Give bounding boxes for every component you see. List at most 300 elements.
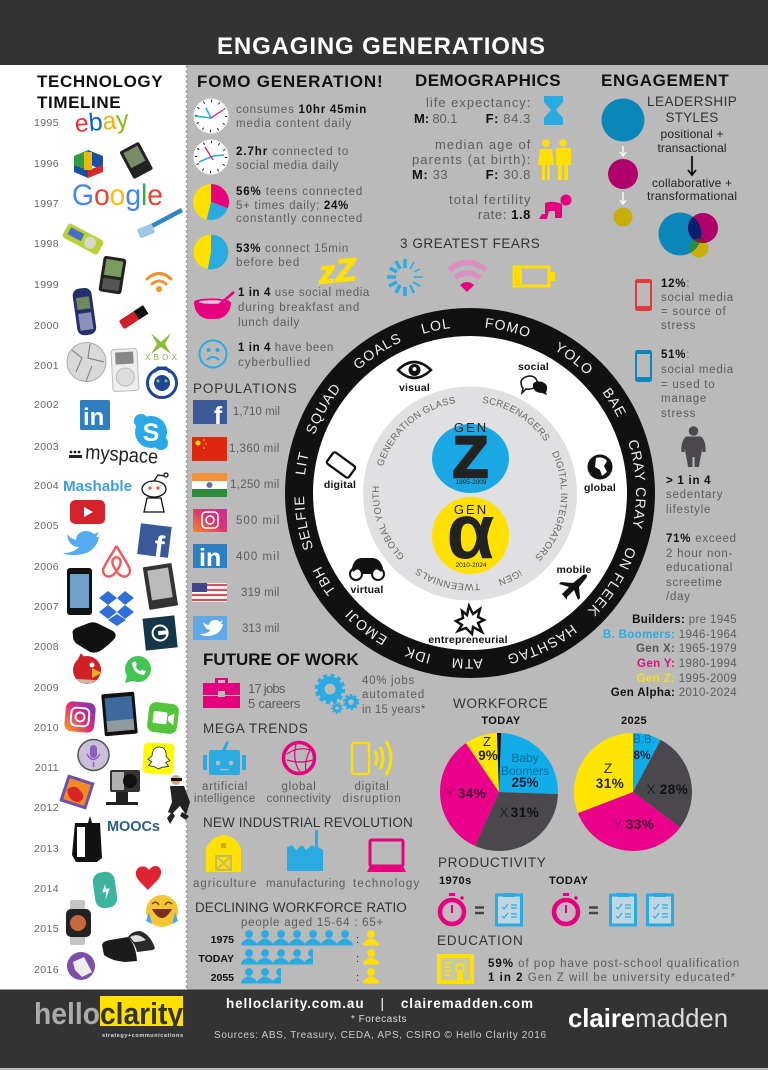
- icon: kindle: [143, 563, 178, 610]
- row labels: TODAY: [198, 953, 234, 965]
- text: revolution labels: agriculture: [193, 878, 257, 890]
- slang words on ring: CRAY CRAY: [629, 440, 646, 530]
- text: ai: intelligence: [194, 793, 256, 805]
- text: styles transition: positional +: [660, 127, 724, 141]
- generation names on inner disc: GENERATION GLASS: [378, 397, 455, 466]
- equals 1970s: [475, 908, 484, 913]
- grey inner disc: [363, 386, 577, 600]
- white ring: [313, 336, 627, 650]
- text: source of stress: = source of: [661, 306, 727, 318]
- heading: engagement: ENGAGEMENT: [601, 71, 729, 90]
- text: manage stress: stress: [661, 408, 696, 420]
- icon: twitter flag: [193, 616, 227, 640]
- icon: instagram: [64, 701, 96, 733]
- icon: blue phone: [635, 350, 652, 382]
- row: 1975: [241, 930, 353, 946]
- text: styles transition: transactional: [658, 141, 726, 155]
- icon: angry bird: [73, 653, 102, 684]
- icon: stopwatch 1970s: [440, 893, 464, 924]
- icon: crawling baby: [539, 194, 572, 219]
- icon: ipod: [111, 348, 139, 392]
- text: leadership styles: [647, 94, 737, 125]
- year labels: 2010: [34, 722, 59, 734]
- text: screentime: 71% exceed: [666, 533, 737, 545]
- equals today: [589, 908, 598, 913]
- pie labels: today: Baby: [511, 751, 539, 765]
- text: median age: F: 30.8: [486, 167, 531, 182]
- icon: xbox: [145, 333, 178, 362]
- legend: generation dates: Gen Z: 1995-2009: [637, 673, 737, 685]
- text: population figures: 1,360 mil: [229, 443, 280, 455]
- chart: central generation wheel: [285, 308, 655, 678]
- logo: claire madden: clairemadden: [568, 1003, 728, 1033]
- heading: declining workforce ratio: DECLINING WORKFORCE RATIO: [195, 900, 407, 915]
- gen z badge: Z: [453, 425, 488, 490]
- icon: airbnb: [103, 546, 130, 577]
- text: styles transition: transformational: [647, 189, 737, 203]
- colons: :: [356, 953, 359, 965]
- text: revolution labels: technology: [353, 878, 420, 890]
- text: education stats: 1 in 2 Gen Z will be university educated*: [488, 972, 736, 984]
- text: source of stress: stress: [661, 320, 696, 332]
- icon: youtube: [70, 500, 105, 524]
- year labels: 2009: [34, 682, 59, 694]
- icon: clock 10hr 45min: [194, 98, 228, 134]
- text: jobs careers: [248, 681, 301, 711]
- text: population figures: 1,710 mil: [233, 406, 280, 418]
- text: source of stress: [661, 278, 734, 332]
- text: connectivity: global: [282, 781, 316, 793]
- chart: workforce ratio pictogram: [198, 917, 384, 984]
- panel: populations: [192, 400, 280, 640]
- panel: fomo generation stats: 5+ times daily; 24%: [236, 200, 349, 212]
- icon: nokia phone: [72, 287, 97, 336]
- year labels: 2004: [34, 480, 59, 492]
- text: automation: [362, 675, 426, 716]
- text: jobs careers: 17 jobs: [248, 681, 286, 696]
- icon: low battery: [514, 267, 555, 286]
- slang words on ring: IDK: [404, 646, 430, 664]
- header band: [0, 0, 768, 65]
- links: helloclarity.com.au | clairemadden.com: [226, 996, 533, 1011]
- text: automation: automated: [362, 689, 425, 701]
- text: today: TODAY: [549, 875, 589, 887]
- icon: mp3 player: [62, 223, 104, 255]
- footer band: [0, 990, 768, 1068]
- year labels: 1999: [34, 279, 59, 291]
- year labels: 2000: [34, 320, 59, 332]
- icon: mobile plane: [556, 564, 592, 600]
- panel: technology timeline: [34, 72, 190, 980]
- year labels: 1995: [34, 117, 59, 129]
- pie labels: today: Boomers: [501, 764, 549, 778]
- year labels: 2016: [34, 964, 59, 976]
- text: education stats: [488, 958, 740, 984]
- icon: ebay: ebay: [74, 105, 130, 138]
- text: screentime: educational: [666, 562, 733, 574]
- icon: usa flag: [192, 583, 227, 602]
- legend: generation dates: Builders: pre 1945: [632, 614, 737, 626]
- chart: workforce 2025 pie: 2025: [621, 715, 647, 727]
- text: population figures: 319 mil: [241, 587, 280, 599]
- logo: hello clarity: hello: [34, 996, 100, 1031]
- year labels: 2014: [34, 883, 59, 895]
- icon: clipboard today one: [610, 893, 636, 925]
- heading: future of work: FUTURE OF WORK: [203, 650, 359, 669]
- panel: future of work: [203, 675, 426, 716]
- row labels: 2055: [211, 972, 234, 984]
- icon: siri: [78, 740, 109, 770]
- legend: generation dates: Gen Y: 1980-1994: [637, 658, 737, 670]
- text: life expectancy: M: 80.1: [414, 111, 458, 126]
- icon: moocs: MOOCs: [107, 819, 160, 835]
- panel: productivity: [439, 875, 672, 925]
- slang words on ring: SELFIE: [294, 496, 312, 550]
- icon: digital disruption: [352, 741, 391, 775]
- text: median age: [412, 137, 531, 182]
- text: styles transition: collaborative +: [652, 176, 732, 190]
- icon: twitter: [63, 531, 99, 555]
- generation names on inner disc: [372, 396, 568, 590]
- icon: wifi: [147, 274, 171, 290]
- chart: workforce today pie: TODAY: [481, 715, 521, 727]
- pie labels: 2025: Y: [613, 816, 623, 832]
- text: manage stress: 51%:: [661, 349, 690, 361]
- icon: mashable: Mashable: [63, 478, 132, 495]
- generation names on inner disc: DIGITAL INTEGRATORS: [536, 450, 568, 560]
- heading: demographics: DEMOGRAPHICS: [415, 71, 561, 90]
- year labels: 2005: [34, 520, 59, 532]
- pie labels: 2025: Z: [604, 760, 613, 776]
- pie labels: today: 31%: [511, 805, 539, 820]
- slang words on ring: ON FLEEK: [588, 548, 635, 617]
- icon: global: global: [584, 482, 616, 494]
- text: screentime: [666, 533, 737, 603]
- text: fertility: rate: 1.8: [478, 207, 531, 222]
- pie labels: today: X: [499, 804, 509, 820]
- icon: snapchat: [142, 742, 175, 775]
- text: life expectancy: [414, 95, 531, 126]
- row: today: [241, 949, 320, 964]
- panel: fomo generation stats: cyberbullied: [238, 357, 311, 369]
- icon: ipad: [101, 692, 138, 736]
- pie labels: 2025: 28%: [660, 782, 688, 797]
- pie labels: today: 34%: [458, 786, 486, 801]
- panel: fomo generation stats: before bed: [236, 257, 300, 269]
- panel: mega trends: [194, 741, 402, 805]
- icon: china flag: [192, 437, 227, 461]
- icon: apple watch: [66, 900, 91, 945]
- year labels: 1996: [34, 158, 59, 170]
- icon: entrepreneurial star: entrepreneurial: [428, 634, 508, 646]
- icon: entrepreneurial star: [428, 606, 508, 646]
- pie labels: today: 25%: [511, 775, 539, 790]
- text: source of stress: social media: [661, 292, 734, 304]
- icon: skype: S: [143, 419, 159, 447]
- heading: workforce: WORKFORCE: [453, 696, 548, 711]
- icon: 3d printer: [72, 816, 102, 862]
- text: disruption: digital: [354, 781, 390, 793]
- text: sedentary: lifestyle: [666, 504, 711, 516]
- heading: technology timeline: TIMELINE: [37, 93, 121, 112]
- text: population figures: 1,250 mil: [230, 479, 280, 491]
- legend: generation dates: B. Boomers: 1946-1964: [603, 629, 737, 641]
- gen alpha badge: [432, 487, 509, 575]
- panel: industrial revolution: [193, 830, 420, 890]
- year labels: 2011: [35, 762, 59, 774]
- text: ai: artificial: [202, 781, 248, 793]
- icon: laughing emoji: [146, 895, 178, 927]
- heading: 3 greatest fears: 3 GREATEST FEARS: [400, 236, 540, 251]
- icon: candy crush: [59, 774, 95, 810]
- slang words on ring: [294, 318, 646, 669]
- icon: visual eye: visual: [399, 382, 430, 394]
- year labels: 2001: [34, 360, 59, 372]
- slang words on ring: LIT: [296, 452, 308, 474]
- slang words on ring: YOLO: [557, 342, 592, 374]
- icon: ethernet cable: [137, 210, 182, 239]
- icon: fitbit: [92, 871, 118, 909]
- slang words on ring: HASHTAG: [508, 624, 577, 664]
- logo: hello clarity: clarity: [100, 996, 184, 1031]
- icon: social bubbles: social: [518, 361, 549, 373]
- pie labels: 2025: 33%: [626, 817, 654, 832]
- icon: psy dancer: [167, 775, 190, 824]
- icon: skype: [134, 414, 168, 450]
- text: revolution labels: manufacturing: [266, 878, 346, 890]
- gen z badge: 1995-2009: [455, 479, 487, 486]
- text: breakfast: 1 in 4 use social media: [238, 287, 370, 299]
- icon: red phone: [635, 279, 652, 311]
- slang words on ring: TBH: [312, 566, 334, 596]
- pie labels: today: Y: [445, 785, 455, 801]
- panel: leadership styles: [602, 94, 737, 258]
- panel: education: [439, 956, 740, 984]
- gen z badge: GEN: [454, 420, 488, 435]
- icon: clipboard 1970s: [496, 893, 522, 925]
- pie labels: today: Z: [483, 734, 491, 749]
- gen alpha badge: GEN: [454, 502, 488, 517]
- icon: briefcase: [203, 678, 240, 708]
- gen alpha badge: 2010-2024: [455, 562, 487, 569]
- icon: zz sleep: zZ: [315, 251, 359, 291]
- icon: linkedin flag: in: [199, 544, 221, 572]
- icon: india flag: [192, 473, 227, 497]
- outer black ring: [285, 308, 655, 678]
- icon: digital tablet: [324, 451, 356, 491]
- title: ENGAGING GENERATIONS: [217, 33, 545, 60]
- text: life expectancy: F: 84.3: [486, 111, 531, 126]
- panel: greatest fears icons: [387, 259, 555, 296]
- text: connectivity: connectivity: [266, 793, 332, 805]
- text: social media time: 2.7hr connected to: [236, 146, 349, 158]
- icon: heart: [136, 866, 161, 890]
- icon: cereal bowl: [194, 292, 234, 319]
- text: jobs careers: 5 careers: [248, 696, 301, 711]
- legend: generation dates: Gen X: 1965-1979: [636, 643, 737, 655]
- year labels: 1998: [34, 238, 59, 250]
- year labels: 2002: [34, 399, 59, 411]
- text: screentime: screetime: [666, 577, 723, 589]
- icon: global: [584, 454, 616, 494]
- icon: virtual binoculars: [350, 558, 384, 596]
- heading: technology timeline: [37, 72, 163, 112]
- icon: wikipedia globe: [67, 342, 106, 382]
- heading: fomo generation: FOMO GENERATION!: [197, 72, 383, 91]
- pie labels: 2025: B.B.: [633, 734, 655, 746]
- colons: :: [356, 934, 359, 946]
- 65+ figures: [363, 930, 379, 984]
- heading: mega trends: MEGA TRENDS: [203, 721, 308, 736]
- legend: generation dates: Gen Alpha: 2010-2024: [611, 687, 737, 699]
- text: sedentary: [666, 475, 723, 516]
- icon: usb stick: [119, 305, 148, 329]
- generation names on inner disc: TWEENNIALS: [416, 568, 480, 590]
- icon: parents: [538, 139, 571, 180]
- year labels: 2015: [34, 923, 59, 935]
- icon: linkedin: [80, 400, 110, 431]
- icon: facebook flag: [193, 400, 227, 430]
- icon: mobile plane: mobile: [556, 564, 592, 576]
- icon: robot: [203, 741, 246, 775]
- year labels: 2006: [34, 561, 59, 573]
- text: manage stress: manage: [661, 393, 707, 405]
- icon: blackberry: [98, 256, 127, 295]
- chart: workforce 2025 pie: [574, 715, 692, 851]
- year labels: 2012: [34, 802, 59, 814]
- icon: stopwatch today: [554, 893, 578, 924]
- chart: workforce ratio pictogram: people aged 15-64 : 65+: [241, 917, 384, 929]
- text: education stats: 59% of pop have post-school qualification: [488, 958, 740, 970]
- slang words on ring: GOALS: [354, 334, 400, 368]
- text: sedentary: > 1 in 4: [666, 475, 711, 487]
- icon: nintendo 64: [74, 150, 103, 178]
- icon: social bubbles: [518, 361, 549, 395]
- text: population figures: 313 mil: [242, 623, 280, 635]
- slang words on ring: BAE: [602, 388, 626, 417]
- icon: stacked circles: [602, 98, 644, 226]
- icon: weak wifi: [449, 262, 486, 292]
- text: ai: [194, 781, 256, 805]
- icon: laptop: [367, 840, 406, 872]
- text: disruption: disruption: [342, 793, 402, 805]
- colons: [356, 934, 359, 984]
- chart: workforce today pie: [440, 715, 558, 851]
- icon: apple tv: [72, 622, 116, 653]
- text: leadership styles: LEADERSHIP: [647, 94, 737, 109]
- icon: hourglass: [544, 96, 563, 125]
- heading: productivity: PRODUCTIVITY: [438, 855, 546, 870]
- text: leadership styles: STYLES: [666, 110, 718, 125]
- icon: facebook: [136, 523, 172, 565]
- text: median age: M: 33: [412, 167, 448, 182]
- text: fertility: total fertility: [449, 192, 531, 207]
- text: automation: 40% jobs: [362, 675, 415, 687]
- logo: hello clarity: [34, 996, 184, 1039]
- generation names on inner disc: GLOBAL YOUTH: [372, 486, 404, 560]
- icon: instagram flag: [193, 509, 227, 532]
- heading: new industrial revolution: NEW INDUSTRIAL REVOLUTION: [203, 815, 413, 830]
- pie labels: 2025: 8%: [633, 748, 651, 762]
- icon: sedentary person: [681, 426, 706, 467]
- icon: clock 2.7hr: [194, 140, 228, 174]
- panel: wellbeing stats: [603, 278, 737, 699]
- pie labels: 2025: 31%: [596, 776, 624, 791]
- pie labels: 2025: [596, 734, 688, 832]
- year labels: 2008: [34, 641, 59, 653]
- row labels: [198, 934, 234, 984]
- slang words on ring: ATM: [452, 658, 483, 669]
- pie labels: 2025: X: [646, 781, 656, 797]
- pie labels: today: [445, 734, 549, 820]
- heading: technology timeline: TECHNOLOGY: [37, 72, 163, 91]
- icon: facebook: f: [152, 530, 167, 564]
- icon: dropbox: [99, 591, 134, 626]
- panel: fomo generation stats: [193, 98, 370, 369]
- heading: populations: POPULATIONS: [193, 381, 297, 396]
- text: 1970s: 1970s: [439, 875, 472, 887]
- text: connectivity: [266, 781, 332, 805]
- panel: technology timeline background: [0, 65, 187, 990]
- icon: global connectivity: [284, 742, 314, 774]
- icon: myspace: myspace: [85, 442, 159, 469]
- text: population figures: 400 mil: [236, 551, 280, 563]
- text: life expectancy: life expectancy:: [426, 95, 531, 110]
- text: median age: median age of: [435, 137, 531, 152]
- slang words on ring: FOMO: [486, 318, 530, 336]
- icon: xbox: XBOX: [145, 353, 178, 362]
- text: styles transition: [647, 127, 737, 203]
- chart: teens connected pie: [193, 184, 229, 220]
- text: automation: in 15 years*: [362, 704, 426, 716]
- text: media content: consumes 10hr 45min: [236, 104, 367, 116]
- panel: fomo generation stats: media content daily: [236, 118, 352, 130]
- icon: barn: [206, 835, 241, 872]
- text: manage stress: social media: [661, 364, 734, 376]
- slang words on ring: LOL: [421, 319, 450, 334]
- slang words on ring: SQUAD: [306, 384, 339, 434]
- icon: whatsapp: [125, 656, 151, 683]
- icon: napster: [148, 368, 176, 398]
- colons: :: [356, 972, 359, 984]
- gen z badge: [432, 420, 509, 493]
- text: population figures: 500 mil: [236, 515, 280, 527]
- text: population figures: [229, 406, 280, 635]
- heading: education: EDUCATION: [437, 933, 523, 948]
- panel: fomo generation stats: during breakfast and: [238, 302, 360, 314]
- panel: fomo generation stats: lunch daily: [238, 317, 300, 329]
- year labels: 2013: [34, 843, 59, 855]
- icon: facetime: [146, 701, 180, 735]
- generation names on inner disc: iGEN: [498, 570, 522, 586]
- footnote: * Forecasts: [351, 1014, 407, 1025]
- slang words on ring: EMOJI: [345, 610, 387, 646]
- icon: certificate: [439, 956, 472, 984]
- text: source of stress: 12%:: [661, 278, 690, 290]
- pie labels: today: 9%: [478, 748, 498, 763]
- icon: sad face: [200, 340, 226, 368]
- icon: iphone: [67, 568, 92, 615]
- icon: clipboard today two: [648, 893, 672, 925]
- icon: gears: [316, 676, 358, 713]
- icon: factory: [287, 830, 323, 871]
- icon: gopro: [106, 770, 140, 805]
- legend: generation dates: [603, 614, 737, 699]
- text: disruption: [342, 781, 402, 805]
- icon: linkedin: in: [83, 404, 104, 431]
- icon: virtual binoculars: virtual: [351, 584, 383, 596]
- text: before bed: 53% connect 15min: [236, 243, 349, 255]
